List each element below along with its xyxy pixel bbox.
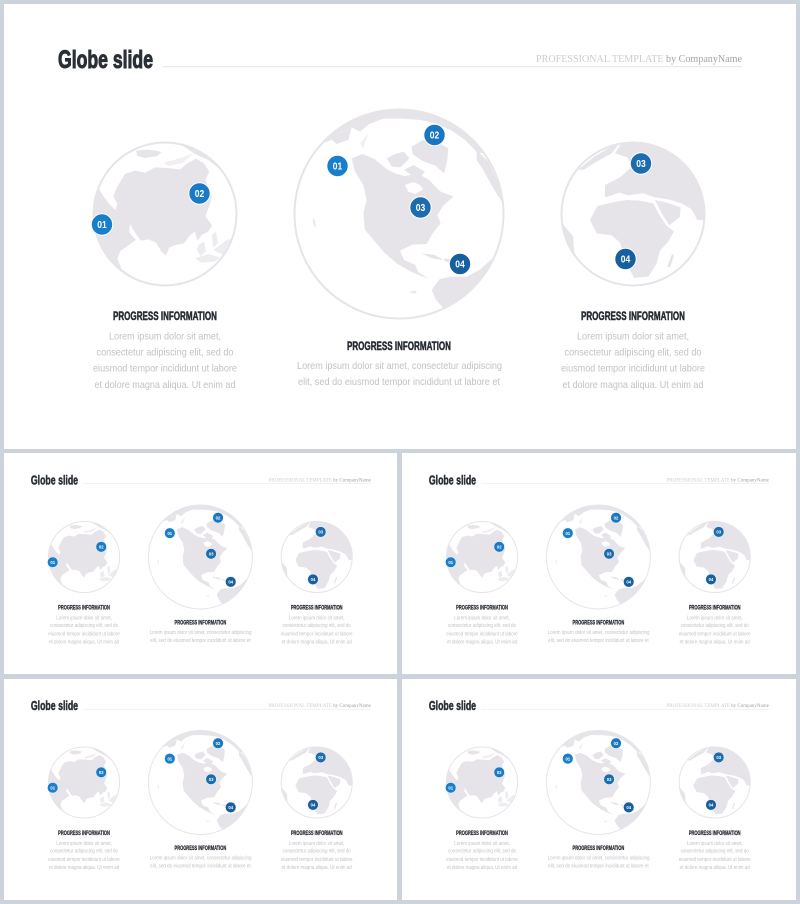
text block: middle: elit, sed do eiusmod tempor incididunt ut labore et <box>298 376 500 388</box>
slide thumbnail: top left: Lorem ipsum dolor sit amet, <box>289 615 345 621</box>
slide thumbnail: top left: 02 <box>216 515 221 521</box>
globe: Asia <box>88 142 238 288</box>
slide thumbnail: bottom right: 02 <box>614 741 619 747</box>
slide thumbnail: bottom right: consectetur adipiscing elit, sed do <box>448 849 516 855</box>
slide thumbnail: top left: 02 <box>99 545 104 551</box>
text block: right <box>561 309 705 391</box>
slide thumbnail: bottom left: consectetur adipiscing elit, sed do <box>50 849 118 855</box>
slide thumbnail: top right: Lorem ipsum dolor sit amet, <box>687 615 743 621</box>
slide thumbnail: bottom left: eiusmod tempor incididunt ut labore <box>48 857 120 863</box>
slide thumbnail: top left: PROFESSIONAL TEMPLATE by CompanyName <box>268 477 372 483</box>
slide thumbnail: top left: eiusmod tempor incididunt ut labore <box>48 631 120 637</box>
slide thumbnail: bottom right: et dolore magna aliqua. Ut enim ad <box>447 865 517 871</box>
slide thumbnail: top right: 03 <box>716 530 721 536</box>
text block: left <box>93 309 237 391</box>
slide thumbnail: bottom left: 04 <box>311 803 316 809</box>
slide thumbnail: top right: consectetur adipiscing elit, sed do <box>448 623 516 629</box>
slide thumbnail: top right: eiusmod tempor incididunt ut labore <box>446 631 518 637</box>
slide thumbnail: top left: 01 <box>50 560 55 566</box>
text block: left: Lorem ipsum dolor sit amet, <box>109 330 221 342</box>
slide thumbnail: bottom right: PROGRESS INFORMATION <box>573 846 624 852</box>
slide thumbnail: top left: 03 <box>318 530 323 536</box>
slide thumbnail: top left: PROGRESS INFORMATION <box>175 621 226 627</box>
slide thumbnail: bottom right: consectetur adipiscing elit, sed do <box>681 849 749 855</box>
slide thumbnail: top left: et dolore magna aliqua. Ut enim ad <box>49 640 119 646</box>
slide thumbnail: bottom left: Lorem ipsum dolor sit amet, <box>289 841 345 847</box>
slide thumbnail: bottom left: Lorem ipsum dolor sit amet, <box>56 841 112 847</box>
slide thumbnail: top right: PROGRESS INFORMATION <box>573 621 624 627</box>
slide thumbnail: bottom left: PROGRESS INFORMATION <box>58 831 110 837</box>
slide thumbnail: top left: 04 <box>311 577 316 583</box>
slide thumbnail: bottom right: elit, sed do eiusmod tempor incididunt ut labore et <box>548 864 649 870</box>
slide thumbnail: bottom right: eiusmod tempor incididunt ut labore <box>679 857 751 863</box>
slide thumbnail: top left: eiusmod tempor incididunt ut labore <box>281 631 353 637</box>
globe: Africa <box>553 140 713 286</box>
slide thumbnail: bottom left: Globe slide <box>31 699 78 713</box>
slide thumbnail: bottom left: et dolore magna aliqua. Ut enim ad <box>282 865 352 871</box>
header rule <box>163 66 742 67</box>
slide thumbnail: top right: elit, sed do eiusmod tempor incididunt ut labore et <box>548 638 649 644</box>
pin 04 America: 04 <box>455 260 465 270</box>
slide thumbnail: bottom right: Lorem ipsum dolor sit amet, <box>687 841 743 847</box>
pin 03 America <box>410 197 431 218</box>
pin 03 America: 03 <box>416 203 426 214</box>
slide thumbnail: top right: consectetur adipiscing elit, sed do <box>681 623 749 629</box>
slide thumbnail: bottom right: 02 <box>497 770 502 776</box>
slide thumbnail: top left <box>4 453 397 674</box>
text block: middle <box>297 339 502 388</box>
slide thumbnail: bottom left: 03 <box>318 755 323 761</box>
pin 01 Asia: 01 <box>97 220 107 231</box>
slide thumbnail: bottom left: PROFESSIONAL TEMPLATE by CompanyName <box>268 703 372 709</box>
text block: right: PROGRESS INFORMATION <box>581 309 685 323</box>
slide thumbnail: top right: 01 <box>565 531 570 537</box>
slide thumbnail: bottom left: 01 <box>167 756 172 762</box>
slide thumbnail: top left: 03 <box>209 552 214 558</box>
slide thumbnail: top right: 01 <box>448 560 453 566</box>
slide thumbnail: top right: 03 <box>607 552 612 558</box>
slide thumbnail: bottom left: 02 <box>99 770 104 776</box>
slide thumbnail: bottom right: 04 <box>709 803 714 809</box>
slide thumbnail: top left: Lorem ipsum dolor sit amet, <box>56 615 112 621</box>
text block: left: et dolore magna aliqua. Ut enim ad <box>94 379 236 391</box>
slide thumbnail: bottom left: 02 <box>216 741 221 747</box>
pin 04 America <box>449 253 471 275</box>
slide thumbnail: bottom right: 03 <box>607 777 612 783</box>
slide thumbnail: bottom left: elit, sed do eiusmod tempor incididunt ut labore et <box>150 864 251 870</box>
pin 03 Africa: 03 <box>636 159 646 170</box>
slide thumbnail: bottom right: Globe slide <box>429 699 476 713</box>
text block: middle: Lorem ipsum dolor sit amet, consectetur adipiscing <box>297 360 502 372</box>
slide thumbnail: top right: PROGRESS INFORMATION <box>689 606 741 612</box>
subtitle: PROFESSIONAL TEMPLATE by CompanyName <box>536 54 742 65</box>
slide thumbnail: bottom right: Lorem ipsum dolor sit amet, <box>454 841 510 847</box>
slide thumbnail: bottom left: PROGRESS INFORMATION <box>175 846 226 852</box>
pin 02 America <box>424 124 445 146</box>
text block: left: eiusmod tempor incididunt ut labore <box>93 362 237 374</box>
slide thumbnail: bottom right: PROGRESS INFORMATION <box>456 831 508 837</box>
slide thumbnail: bottom right: 01 <box>565 756 570 762</box>
text block: right: Lorem ipsum dolor sit amet, <box>577 330 689 342</box>
slide thumbnail: bottom left: consectetur adipiscing elit, sed do <box>283 849 351 855</box>
text block: right: consectetur adipiscing elit, sed do <box>564 346 702 358</box>
text block: left: PROGRESS INFORMATION <box>113 309 217 323</box>
pin 03 Africa <box>630 153 652 174</box>
text block: right: et dolore magna aliqua. Ut enim ad <box>562 379 704 391</box>
slide thumbnail: bottom left: 03 <box>209 777 214 783</box>
pin 04 Africa: 04 <box>621 254 631 266</box>
slide thumbnail: top right: et dolore magna aliqua. Ut enim ad <box>447 640 517 646</box>
slide thumbnail: top right: PROFESSIONAL TEMPLATE by CompanyName <box>666 477 770 483</box>
slide thumbnail: top right: PROGRESS INFORMATION <box>456 606 508 612</box>
slide thumbnail: bottom right: 03 <box>716 755 721 761</box>
pin 04 Africa <box>615 248 636 270</box>
slide thumbnail: top right: 02 <box>497 545 502 551</box>
slide thumbnail: top right: 04 <box>709 577 714 583</box>
slide thumbnail: bottom left: PROGRESS INFORMATION <box>291 831 343 837</box>
text block: left: consectetur adipiscing elit, sed do <box>96 346 234 358</box>
slide thumbnail: bottom left: Lorem ipsum dolor sit amet, consectetur adipiscing <box>150 856 252 862</box>
pin 02 Asia <box>189 183 210 204</box>
text block: right: eiusmod tempor incididunt ut labore <box>561 362 705 374</box>
slide thumbnail: top right: 04 <box>626 580 631 586</box>
pin 02 America: 02 <box>430 130 440 142</box>
slide thumbnail: bottom left: et dolore magna aliqua. Ut enim ad <box>49 865 119 871</box>
slide thumbnail: bottom right: Lorem ipsum dolor sit amet, consectetur adipiscing <box>548 856 650 862</box>
slide thumbnail: bottom left <box>4 679 397 900</box>
slide thumbnail: top left: PROGRESS INFORMATION <box>291 606 343 612</box>
slide thumbnail: top right: Lorem ipsum dolor sit amet, consectetur adipiscing <box>548 630 650 636</box>
slide thumbnail: top left: Globe slide <box>31 473 78 487</box>
slide thumbnail: top left: elit, sed do eiusmod tempor incididunt ut labore et <box>150 638 251 644</box>
slide thumbnail: top left: consectetur adipiscing elit, sed do <box>283 623 351 629</box>
pin 02 Asia: 02 <box>195 189 205 200</box>
slide thumbnail: bottom left: eiusmod tempor incididunt ut labore <box>281 857 353 863</box>
slide thumbnail: bottom left: 01 <box>50 785 55 791</box>
slide thumbnail: top right: 02 <box>614 515 619 521</box>
title: Globe slide <box>58 46 153 74</box>
slide thumbnail: bottom right <box>402 679 796 900</box>
slide thumbnail: top left: 01 <box>167 531 172 537</box>
slide thumbnail: top left: PROGRESS INFORMATION <box>58 606 110 612</box>
globe: North America <box>294 103 504 318</box>
slide: main <box>4 4 796 449</box>
slide thumbnail: bottom right: PROFESSIONAL TEMPLATE by CompanyName <box>666 703 770 709</box>
slide thumbnail: top right <box>402 453 796 674</box>
slide thumbnail: top right: eiusmod tempor incididunt ut labore <box>679 631 751 637</box>
pin 01 Asia <box>91 214 113 235</box>
slide thumbnail: top right: Lorem ipsum dolor sit amet, <box>454 615 510 621</box>
slide thumbnail: bottom left: 04 <box>228 805 233 811</box>
slide thumbnail: bottom right: 01 <box>448 785 453 791</box>
slide thumbnail: top left: consectetur adipiscing elit, sed do <box>50 623 118 629</box>
slide thumbnail: bottom right: eiusmod tempor incididunt ut labore <box>446 857 518 863</box>
pin 01 America: 01 <box>333 162 343 172</box>
slide thumbnail: top right: et dolore magna aliqua. Ut enim ad <box>680 640 750 646</box>
text block: middle: PROGRESS INFORMATION <box>347 339 451 353</box>
slide thumbnail: top left: Lorem ipsum dolor sit amet, consectetur adipiscing <box>150 630 252 636</box>
pin 01 America <box>327 155 348 177</box>
slide thumbnail: top left: 04 <box>228 580 233 586</box>
slide thumbnail: bottom right: et dolore magna aliqua. Ut enim ad <box>680 865 750 871</box>
slide thumbnail: top left: et dolore magna aliqua. Ut enim ad <box>282 640 352 646</box>
slide thumbnail: top right: Globe slide <box>429 473 476 487</box>
slide thumbnail: bottom right: PROGRESS INFORMATION <box>689 831 741 837</box>
slide thumbnail: bottom right: 04 <box>626 805 631 811</box>
